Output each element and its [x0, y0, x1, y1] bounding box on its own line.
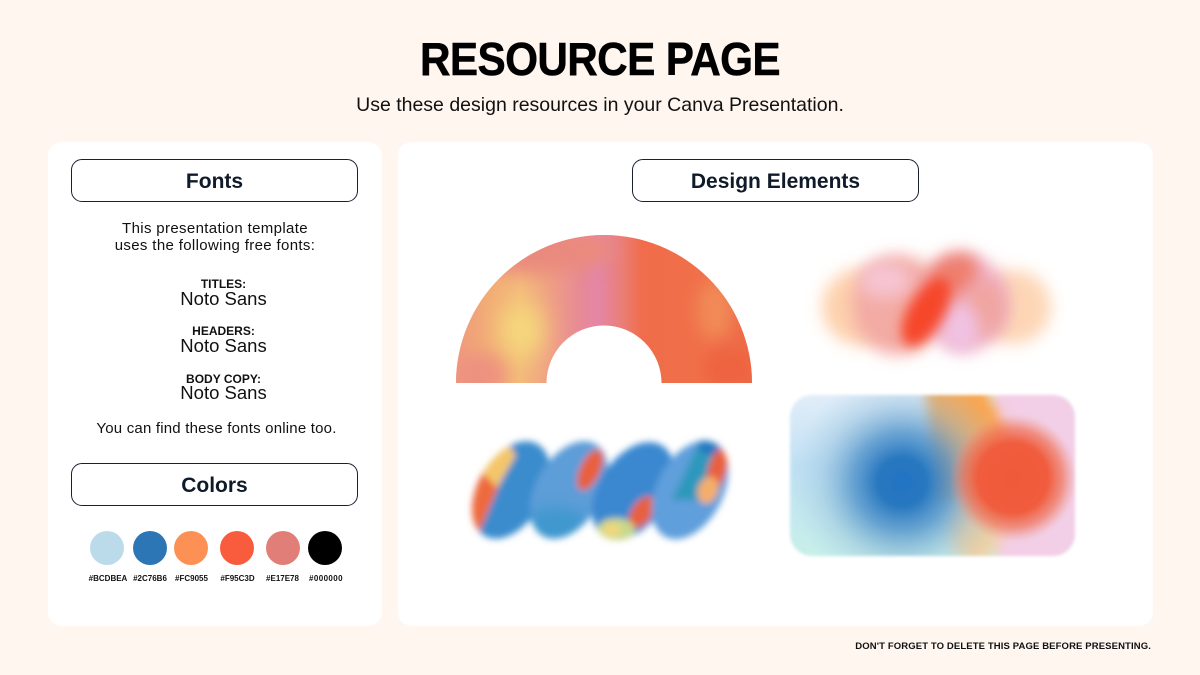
icon: gradient arch [456, 235, 752, 383]
oval 1 [466, 436, 554, 544]
hex label: black: #000000 [309, 574, 343, 583]
text block: body copy font [180, 372, 267, 403]
hex label: red orange: #F95C3D [220, 574, 255, 583]
icon: blurred orange and pink swirl [822, 244, 1051, 355]
icon: blue and red gradient rectangle [788, 392, 1076, 558]
text block: titles font: TITLES: [201, 277, 246, 291]
text block: body copy font: BODY COPY: [186, 372, 261, 386]
swatch: red orange [220, 531, 254, 565]
swatch: light blue [90, 531, 124, 565]
text block: headers font [180, 324, 267, 356]
oval 3 [587, 436, 676, 544]
heading: fonts [71, 159, 358, 202]
heading: colors: Colors [181, 474, 248, 497]
heading: fonts: Fonts [186, 170, 243, 193]
swatch: orange [174, 531, 208, 565]
heading: design elements: Design Elements [691, 170, 860, 193]
text block: font intro [115, 220, 315, 254]
swatch: rose [266, 531, 300, 565]
icon: blurred blue ovals [466, 435, 734, 544]
design elements graphics [456, 235, 1076, 558]
text block: fonts note: You can find these fonts online too. [96, 420, 337, 437]
swatch: blue [133, 531, 167, 565]
panel: fonts and colors [48, 142, 382, 626]
oval 4 [646, 435, 734, 544]
hex label: blue: #2C76B6 [133, 574, 167, 583]
text block: titles font: Noto Sans [180, 288, 267, 308]
text block: headers font: Noto Sans [180, 334, 267, 356]
swatch: black [308, 531, 342, 565]
heading: colors [71, 463, 358, 506]
text block: font intro: uses the following free fonts: [115, 237, 315, 254]
hex label: light blue: #BCDBEA [89, 574, 127, 583]
title: RESOURCE PAGE [420, 33, 780, 85]
heading: design elements [632, 159, 919, 202]
color palette [88, 531, 343, 583]
oval 2 [526, 436, 612, 544]
text block: body copy font: Noto Sans [180, 382, 267, 403]
text block: font intro: This presentation template [122, 220, 308, 236]
hex label: rose: #E17E78 [266, 574, 299, 583]
hex label: orange: #FC9055 [175, 574, 208, 583]
text block: headers font: HEADERS: [192, 324, 255, 338]
subtitle: Use these design resources in your Canva Presentation. [356, 94, 844, 116]
footer note: DON'T FORGET TO DELETE THIS PAGE BEFORE PRESENTING. [855, 641, 1151, 652]
text block: titles font [180, 277, 267, 308]
panel: design elements [398, 142, 1153, 626]
